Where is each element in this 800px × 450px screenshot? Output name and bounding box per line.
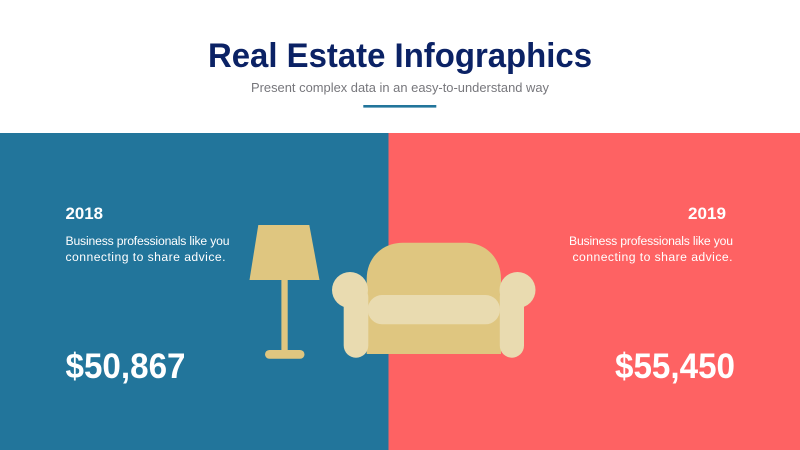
icon: sofa: [332, 243, 536, 358]
icon: floor lamp: [250, 225, 320, 359]
2019 year heading: 2019: [688, 205, 726, 223]
2019 description: Business professionals like you: [569, 234, 733, 248]
panel: 2019 coral background: [388, 133, 800, 450]
2018 description: Business professionals like you: [66, 234, 230, 248]
2019 description: [569, 234, 733, 264]
panel: 2018 blue background: [0, 133, 388, 450]
2018 value: $50,867: [66, 347, 186, 386]
title underline accent: [363, 105, 436, 108]
2019 description: connecting to share advice.: [572, 250, 732, 264]
subtitle: Present complex data in an easy-to-understand way: [251, 80, 549, 95]
2018 description: [66, 234, 230, 264]
2018 year heading: 2018: [66, 205, 103, 223]
2019 value: $55,450: [615, 347, 735, 386]
2018 description: connecting to share advice.: [66, 250, 226, 264]
title: Real Estate Infographics: [208, 37, 592, 75]
